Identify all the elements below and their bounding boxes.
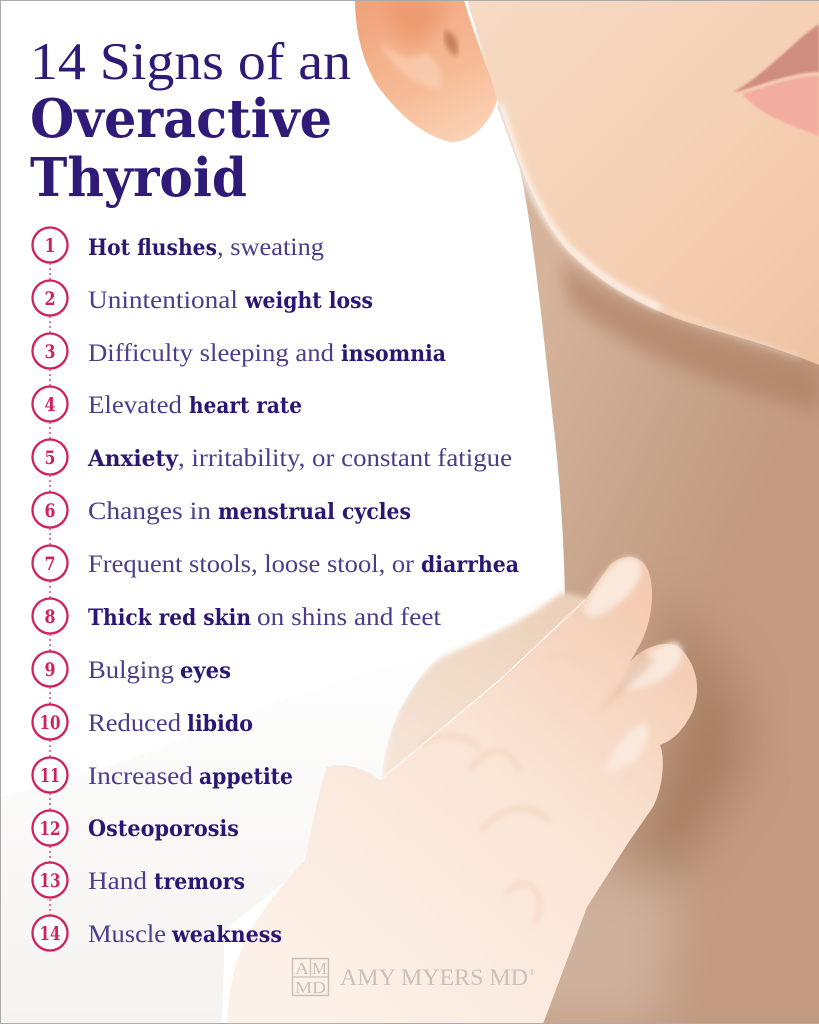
knuckle creases	[420, 655, 585, 925]
title: Thyroid	[30, 147, 247, 209]
item 8	[32, 598, 441, 634]
item 2	[32, 280, 373, 316]
item 6: Changes in	[88, 498, 212, 525]
item 3: insomnia	[341, 341, 446, 367]
logo: Amy Myers MD: AMY MYERS MD	[340, 965, 528, 990]
item 14	[32, 916, 282, 950]
item 6: 6	[44, 500, 56, 522]
item 11: Increased	[88, 763, 194, 790]
item 3: Difficulty sleeping and	[88, 340, 335, 367]
item 11: appetite	[199, 764, 293, 790]
item 1: Hot flushes	[88, 235, 217, 261]
item 4: heart rate	[189, 393, 302, 419]
item 9: eyes	[180, 658, 231, 684]
item 3	[32, 334, 446, 368]
item 13: 13	[40, 870, 60, 892]
finger gap shadow	[590, 650, 655, 720]
item 8: Thick red skin	[88, 605, 251, 631]
item 10: Reduced	[88, 710, 182, 737]
item 1: 1	[44, 235, 56, 257]
list of signs	[32, 228, 519, 950]
item 6: menstrual cycles	[218, 499, 411, 525]
item 11: 11	[40, 765, 60, 787]
face	[467, 0, 819, 365]
item 4: Elevated	[88, 392, 183, 419]
finger edge highlight	[380, 600, 585, 780]
jaw highlight	[500, 104, 660, 308]
item 14: 14	[40, 923, 60, 945]
item 8: 8	[44, 606, 56, 628]
item 1	[32, 228, 325, 262]
lower neck fade	[500, 870, 680, 1024]
item 12	[32, 810, 239, 846]
index fingernail	[583, 557, 641, 618]
logo: Amy Myers MD	[292, 958, 535, 997]
item 12: Osteoporosis	[88, 816, 239, 842]
upper lip	[732, 24, 819, 93]
item 10	[32, 704, 253, 740]
item 6	[32, 492, 411, 528]
item 14: Muscle	[88, 921, 166, 948]
logo: Amy Myers MD: ®	[529, 968, 535, 977]
item 2: 2	[44, 288, 56, 310]
logo: Amy Myers MD: M	[312, 959, 327, 978]
item 10: libido	[187, 711, 253, 737]
item 10: 10	[40, 712, 60, 734]
under-chin shadow	[560, 258, 819, 410]
list connectors	[49, 263, 51, 916]
item 4: 4	[44, 394, 56, 416]
item 7: Frequent stools, loose stool, or	[88, 551, 415, 578]
shoulder	[381, 592, 640, 1024]
logo: Amy Myers MD: A	[295, 959, 310, 978]
item 2: weight loss	[244, 288, 373, 314]
item 8: on shins and feet	[257, 604, 441, 631]
neck	[497, 105, 819, 1024]
item 7: 7	[44, 553, 56, 575]
middle fingernail	[623, 642, 682, 689]
neck shadow behind fingers	[630, 590, 744, 880]
title: 14 Signs of an	[30, 33, 351, 91]
shirt	[0, 650, 445, 1024]
item 5: 5	[44, 447, 56, 469]
logo: Amy Myers MD: MD	[295, 978, 326, 997]
item 13	[32, 862, 245, 898]
title: Overactive	[30, 88, 332, 150]
item 4	[32, 386, 302, 422]
item 2: Unintentional	[88, 287, 238, 314]
item 9: 9	[44, 659, 56, 681]
item 5	[32, 440, 512, 474]
item 9: Bulging	[88, 657, 175, 684]
item 5: , irritability, or constant fatigue	[178, 445, 512, 472]
item 13: Hand	[88, 868, 148, 895]
title	[30, 33, 351, 209]
item 9	[32, 652, 231, 686]
item 3: 3	[44, 341, 56, 363]
item 7: diarrhea	[421, 552, 519, 578]
item 13: tremors	[154, 869, 245, 895]
item 12: 12	[40, 818, 60, 840]
jaw highlight tail	[650, 304, 800, 358]
lower lip	[742, 76, 819, 136]
item 11	[32, 758, 293, 792]
hand	[227, 557, 697, 1024]
item 7	[32, 546, 519, 580]
item 1: , sweating	[217, 234, 325, 261]
item 5: Anxiety	[87, 446, 179, 472]
ring fingernail	[606, 722, 648, 772]
ear	[355, 0, 497, 142]
item 14: weakness	[171, 922, 282, 948]
